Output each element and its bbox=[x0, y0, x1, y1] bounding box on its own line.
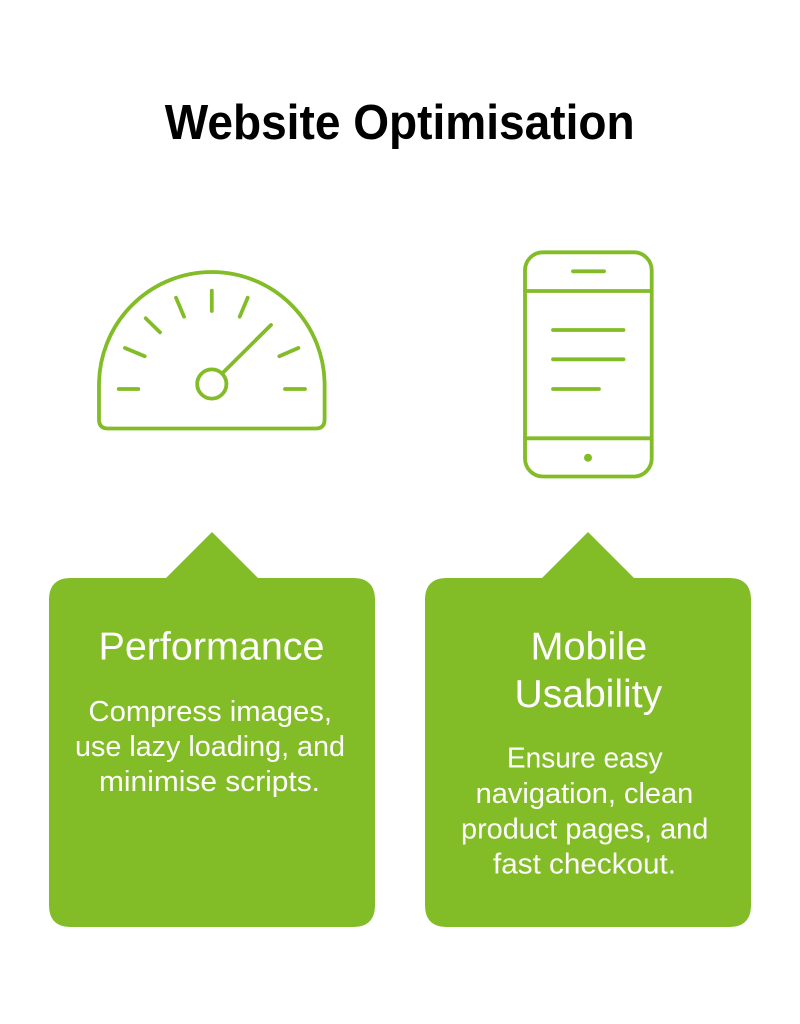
heading: performance: Performance bbox=[98, 626, 324, 668]
text: mobile usability description: fast checkout. bbox=[493, 848, 676, 880]
text: mobile usability description bbox=[461, 742, 708, 880]
icon: mobile phone bbox=[525, 252, 652, 476]
panel: performance bbox=[49, 532, 375, 927]
text: performance description: minimise scripts. bbox=[99, 766, 320, 798]
heading: mobile usability: Mobile bbox=[530, 626, 647, 668]
heading: mobile usability: Usability bbox=[514, 673, 663, 716]
text: performance description: Compress images, bbox=[88, 696, 332, 728]
panel background with pointer bbox=[49, 532, 375, 927]
text: performance description: use lazy loading, and bbox=[75, 731, 345, 763]
text: performance description bbox=[75, 696, 345, 798]
title: Website Optimisation bbox=[165, 96, 635, 150]
panel background with pointer bbox=[425, 532, 751, 927]
panel: mobile usability bbox=[425, 532, 751, 927]
text: mobile usability description: Ensure easy bbox=[507, 742, 663, 774]
text: mobile usability description: product pages, and bbox=[461, 814, 708, 846]
icon: speedometer gauge bbox=[99, 272, 325, 428]
heading: mobile usability bbox=[514, 626, 663, 716]
text: mobile usability description: navigation, clean bbox=[476, 778, 693, 810]
